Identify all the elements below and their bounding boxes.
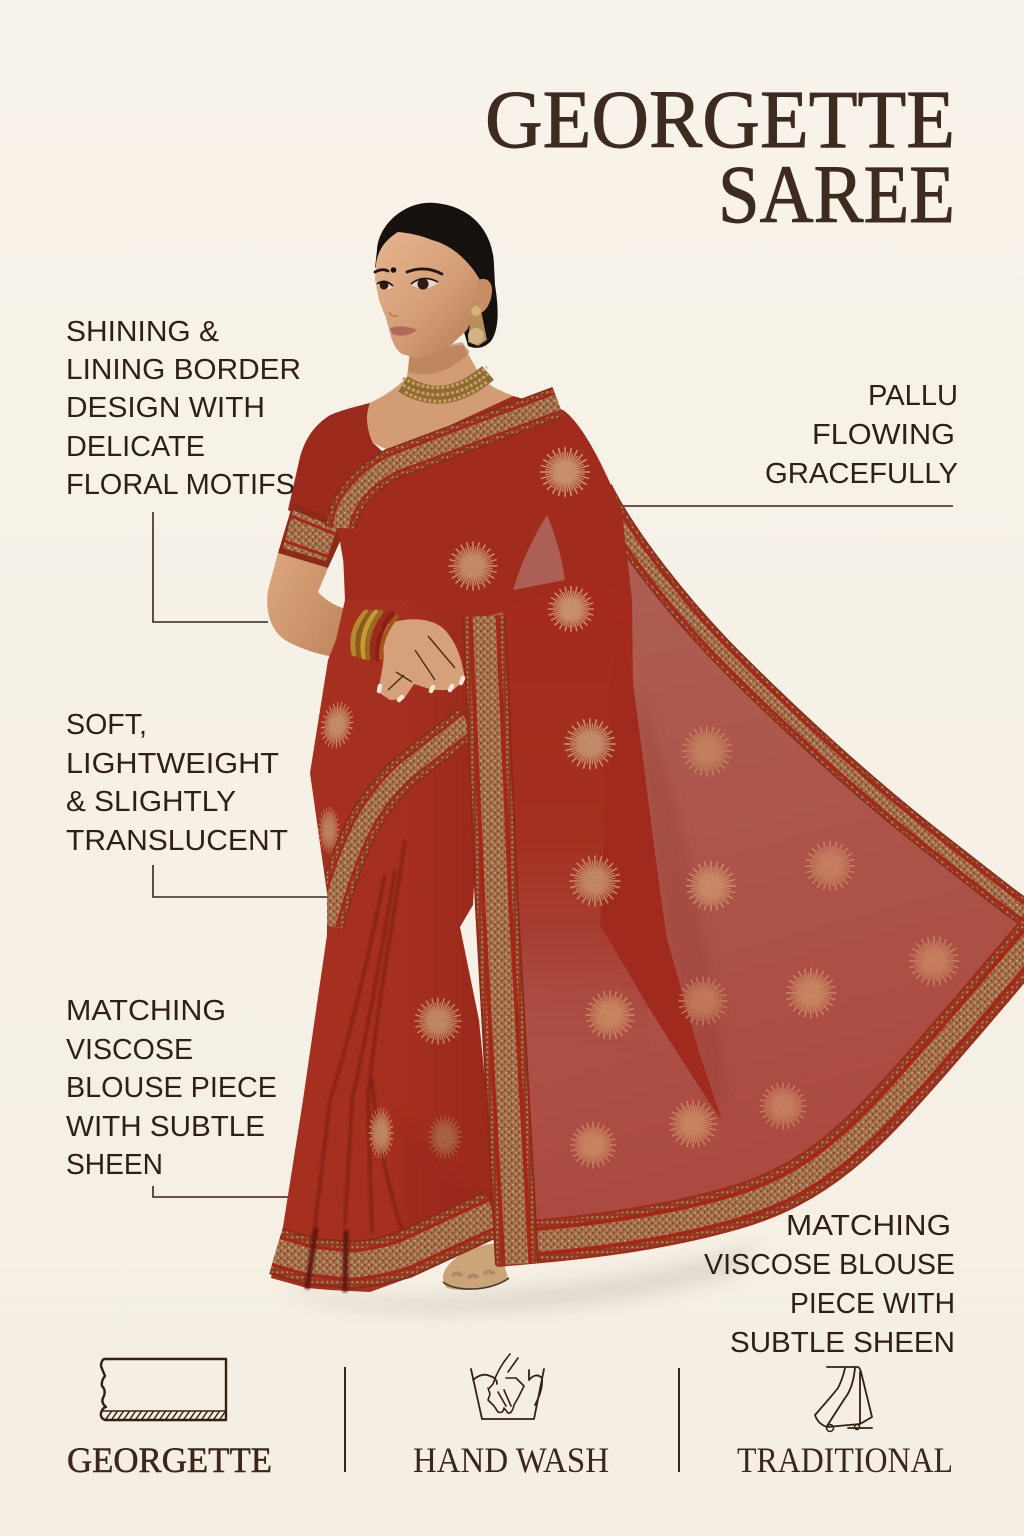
- callout: pallu: PALLU: [868, 380, 958, 412]
- waist border: [327, 722, 468, 925]
- callout lines and labels: border design: FLORAL MOTIFS: [66, 469, 295, 501]
- callout lines and labels: border design: DESIGN WITH: [66, 392, 265, 424]
- icon: hand wash: [471, 1354, 544, 1419]
- hair: [375, 203, 498, 348]
- callout: matching blouse left: SHEEN: [66, 1149, 163, 1181]
- saree figure: [267, 203, 1024, 1312]
- bust border: [341, 402, 558, 528]
- pallu motifs: [565, 719, 958, 1168]
- foreground callout: matching blouse right: [704, 1210, 955, 1359]
- callout: pallu: [612, 380, 958, 506]
- torso and waist drape: [310, 410, 600, 940]
- callout: matching blouse left: VISCOSE: [66, 1034, 193, 1066]
- divider: [344, 1367, 346, 1472]
- callout: soft lightweight: SOFT,: [66, 709, 147, 741]
- callout lines and labels: border design: DELICATE: [66, 431, 205, 463]
- pallu front drape: [503, 580, 722, 1120]
- callout lines and labels: border design: SHINING &: [66, 316, 219, 348]
- pallu top edge border: [600, 490, 1024, 920]
- title: GEORGETTE: [485, 73, 955, 165]
- earring: [468, 306, 487, 346]
- callout: soft lightweight: TRANSLUCENT: [66, 825, 288, 857]
- label: hand wash: HAND WASH: [413, 1440, 609, 1480]
- upper arm and forearm: [267, 553, 385, 662]
- icon: traditional saree: [815, 1367, 872, 1432]
- skirt hem border: [276, 1213, 494, 1292]
- neck and chest: [367, 342, 513, 452]
- foot: [443, 1243, 509, 1290]
- bangles: [353, 612, 397, 659]
- icon: georgette fabric: [101, 1359, 226, 1420]
- callout: soft lightweight: & SLIGHTLY: [66, 786, 236, 818]
- skirt and pleats: [271, 760, 495, 1292]
- label: traditional: TRADITIONAL: [737, 1440, 953, 1480]
- foreground callout: matching blouse right: PIECE WITH: [790, 1288, 955, 1320]
- callout: soft lightweight: LIGHTWEIGHT: [66, 748, 279, 780]
- shoulder drape: [338, 396, 632, 632]
- sleeve border: [278, 503, 342, 568]
- callout: matching blouse left: BLOUSE PIECE: [66, 1072, 277, 1104]
- blouse: [288, 403, 400, 600]
- callout: soft lightweight: [66, 709, 328, 897]
- pallu translucent panel: [480, 490, 1024, 1245]
- face: [375, 232, 492, 358]
- callout lines and labels: border design: LINING BORDER: [66, 354, 301, 386]
- title: [485, 73, 955, 240]
- pallu vertical border: [484, 616, 517, 1264]
- callout: pallu: GRACEFULLY: [765, 458, 958, 490]
- foreground callout: matching blouse right: VISCOSE BLOUSE: [704, 1249, 955, 1281]
- hands: [378, 619, 465, 700]
- callout lines and labels: border design: [66, 316, 301, 622]
- foreground callout: matching blouse right: MATCHING: [786, 1210, 951, 1242]
- callout: matching blouse left: [66, 995, 290, 1197]
- title: SAREE: [718, 148, 955, 240]
- callout: pallu: FLOWING: [812, 419, 955, 451]
- pallu bottom border: [495, 925, 1024, 1245]
- foreground callout: matching blouse right: SUBTLE SHEEN: [730, 1327, 955, 1359]
- necklace: [403, 367, 488, 401]
- label: georgette: GEORGETTE: [67, 1440, 272, 1480]
- callout: matching blouse left: MATCHING: [66, 995, 226, 1027]
- callout: matching blouse left: WITH SUBTLE: [66, 1111, 265, 1143]
- divider: [678, 1368, 680, 1472]
